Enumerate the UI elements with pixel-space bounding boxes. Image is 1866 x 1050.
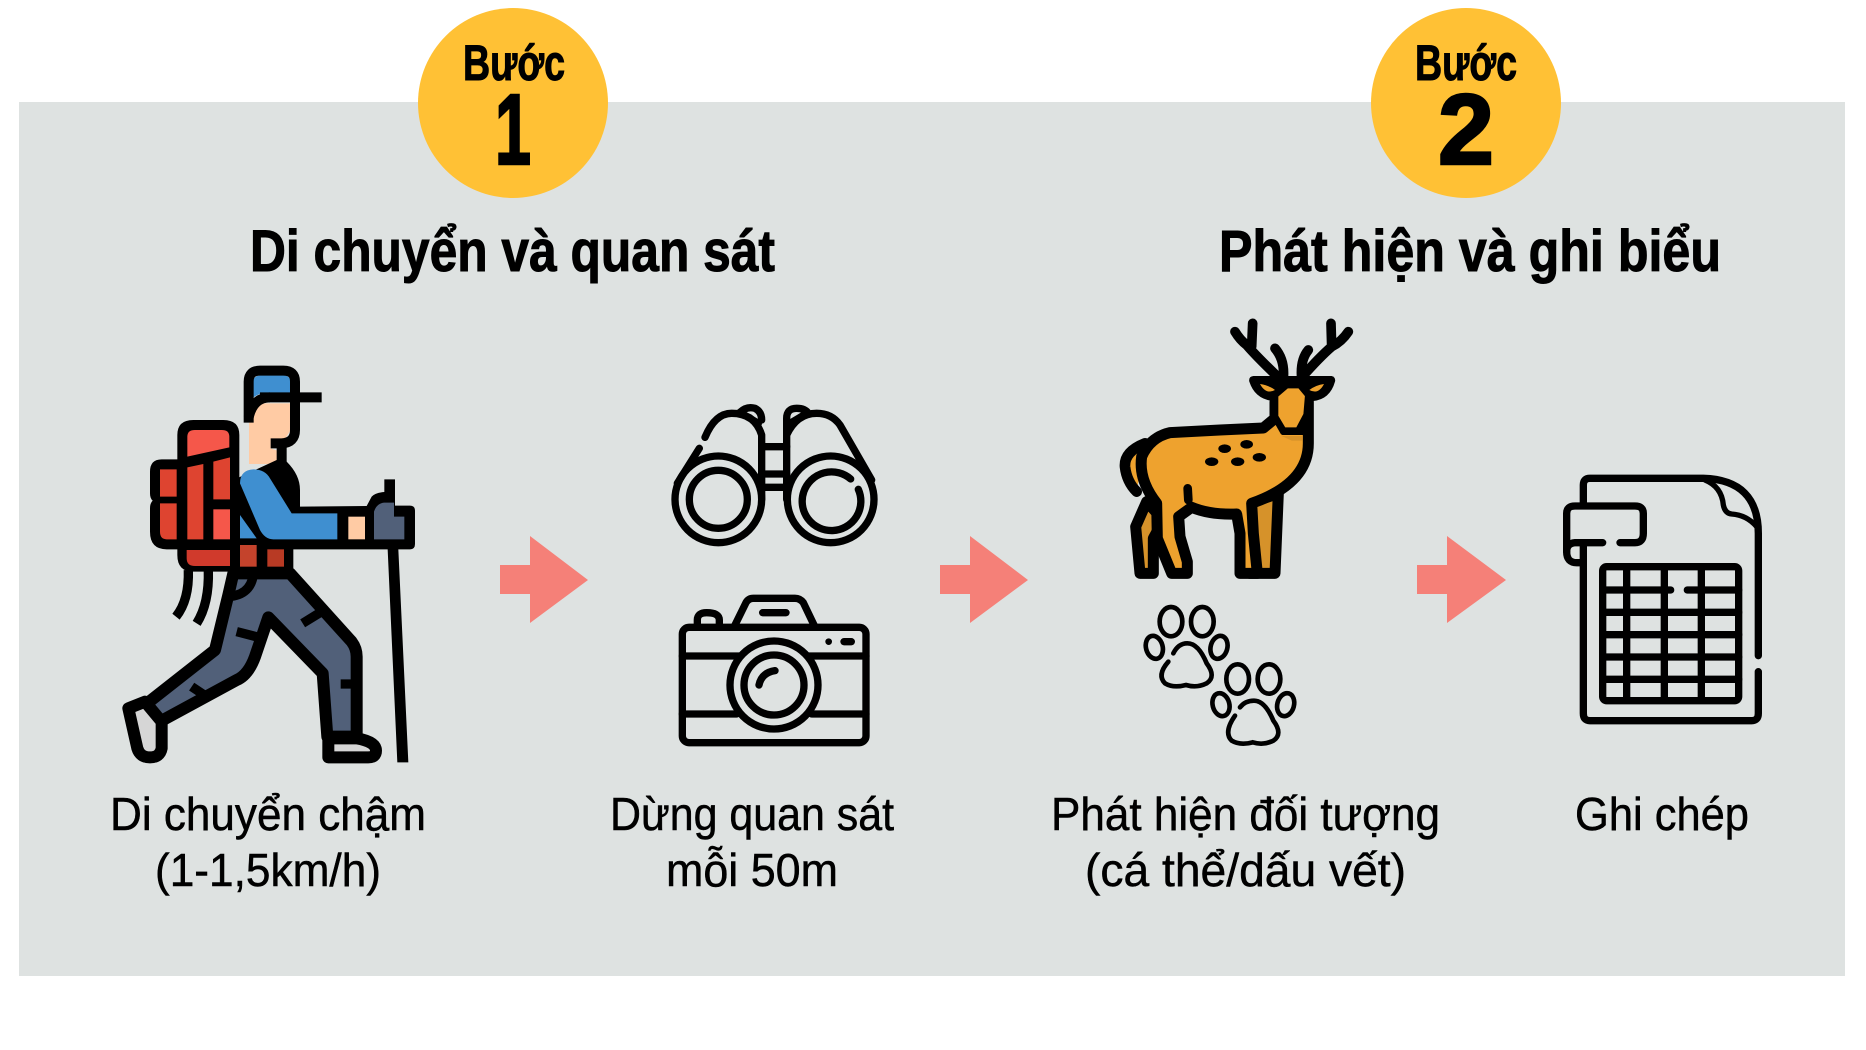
shoes — [128, 702, 162, 757]
label: slow walking: Di chuyển chậm — [110, 788, 426, 840]
tail — [1125, 443, 1145, 492]
trousers — [145, 573, 357, 737]
badge: step 1: Bước — [463, 35, 565, 91]
label: stop to observe — [610, 788, 894, 896]
label: stop to observe: Dừng quan sát — [610, 788, 894, 840]
label: detect subject: Phát hiện đối tượng — [1051, 788, 1440, 840]
body — [1141, 402, 1308, 573]
badge: step 2 — [1371, 8, 1561, 198]
antlers — [1235, 323, 1348, 378]
head — [1275, 385, 1308, 431]
label: slow walking: (1-1,5km/h) — [155, 844, 381, 896]
spots — [1205, 440, 1266, 466]
straps under backpack — [176, 570, 208, 623]
heading: step 2: Phát hiện và ghi biểu — [1219, 219, 1721, 284]
far legs — [1136, 502, 1163, 573]
badge: step 2: Bước — [1415, 35, 1517, 91]
torso — [233, 460, 415, 762]
arrow 3 — [1417, 536, 1506, 623]
arm — [240, 469, 337, 539]
icon: hiker — [128, 371, 415, 762]
icon: camera — [682, 598, 866, 743]
label: slow walking — [110, 788, 426, 896]
neck and face — [249, 403, 291, 464]
heading: step 1: Di chuyển và quan sát — [250, 219, 775, 284]
icon: binoculars — [675, 408, 874, 543]
label: detect subject: (cá thể/dấu vết) — [1085, 844, 1406, 896]
label: detect subject — [1051, 788, 1440, 896]
belt — [240, 545, 257, 567]
hand and glove — [348, 517, 365, 539]
badge: step 1: 1 — [495, 74, 531, 186]
badge: step 1 — [418, 8, 608, 198]
icon: paw prints — [1143, 607, 1297, 744]
icon: deer — [1125, 323, 1348, 573]
label: stop to observe: mỗi 50m — [666, 844, 838, 896]
ears — [1249, 376, 1335, 401]
neck line — [1277, 420, 1303, 432]
badge: step 2: 2 — [1438, 74, 1494, 186]
arrow 2 — [940, 536, 1028, 623]
label: take notes: Ghi chép — [1575, 788, 1749, 840]
backpack — [150, 420, 239, 572]
arrow 1 — [500, 536, 588, 623]
icon: document with table — [1567, 478, 1758, 721]
cap — [253, 375, 291, 398]
